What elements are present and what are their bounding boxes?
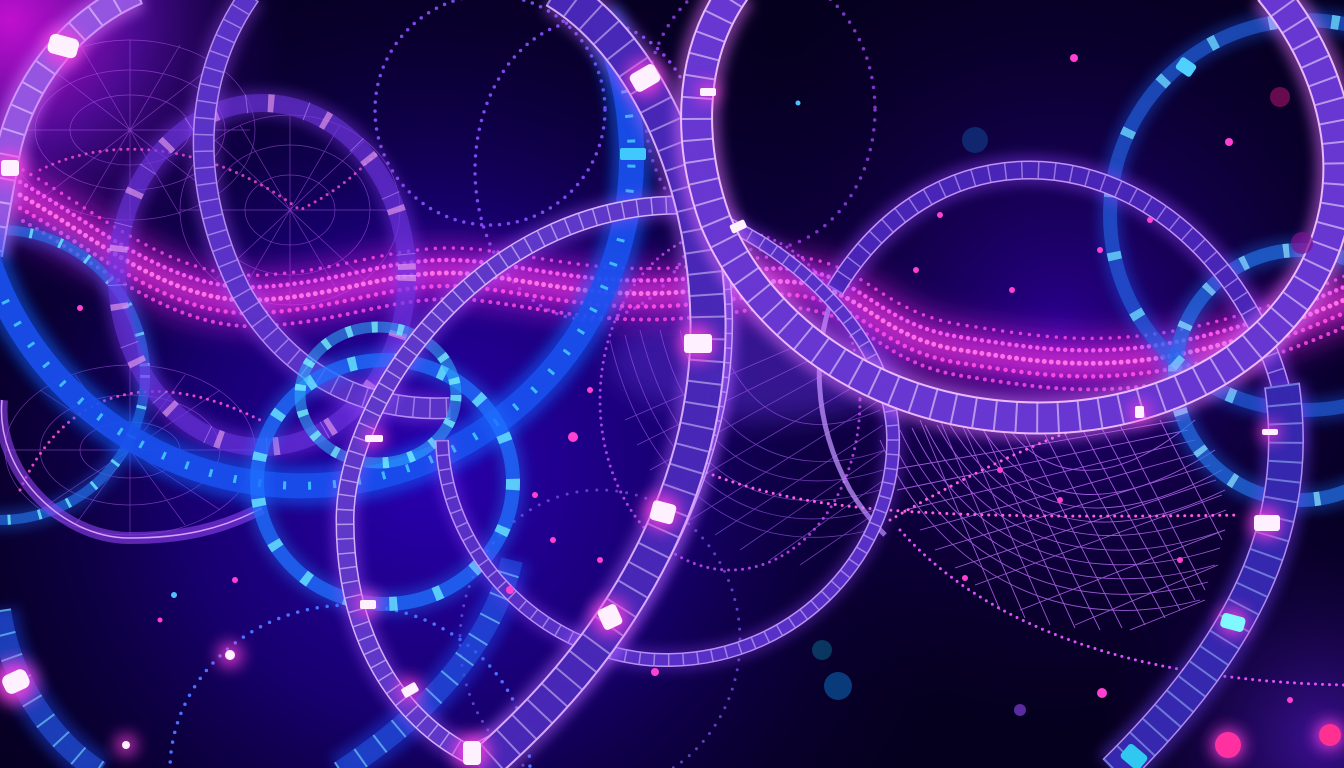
- ring: right small blue: [1175, 250, 1344, 500]
- mesh: right net: [880, 420, 1226, 630]
- ring: large right bright: [697, 0, 1339, 418]
- mesh: centre net: [610, 330, 885, 565]
- ring: purple left inner: [117, 103, 407, 447]
- magenta particle band: [20, 170, 1344, 389]
- ring: right tall purple: [819, 170, 1290, 768]
- ring: small cyan: [300, 327, 456, 463]
- ring: top left bright arc: [0, 0, 138, 255]
- ring: centre tall: [345, 205, 724, 755]
- ring: large blue left: [0, 15, 632, 486]
- mesh: left net: [5, 40, 400, 535]
- ring: lower centre blue: [257, 360, 513, 604]
- ring: right blue: [1110, 20, 1344, 410]
- ring: big arc centre-right: [480, 0, 708, 768]
- ring: bottom left purple arc: [1, 400, 262, 538]
- ring: bottom left large blue: [0, 560, 512, 768]
- ring: top left purple loop: [204, 0, 450, 408]
- ring: centre round: [442, 212, 893, 660]
- ring: blue left small: [0, 230, 145, 520]
